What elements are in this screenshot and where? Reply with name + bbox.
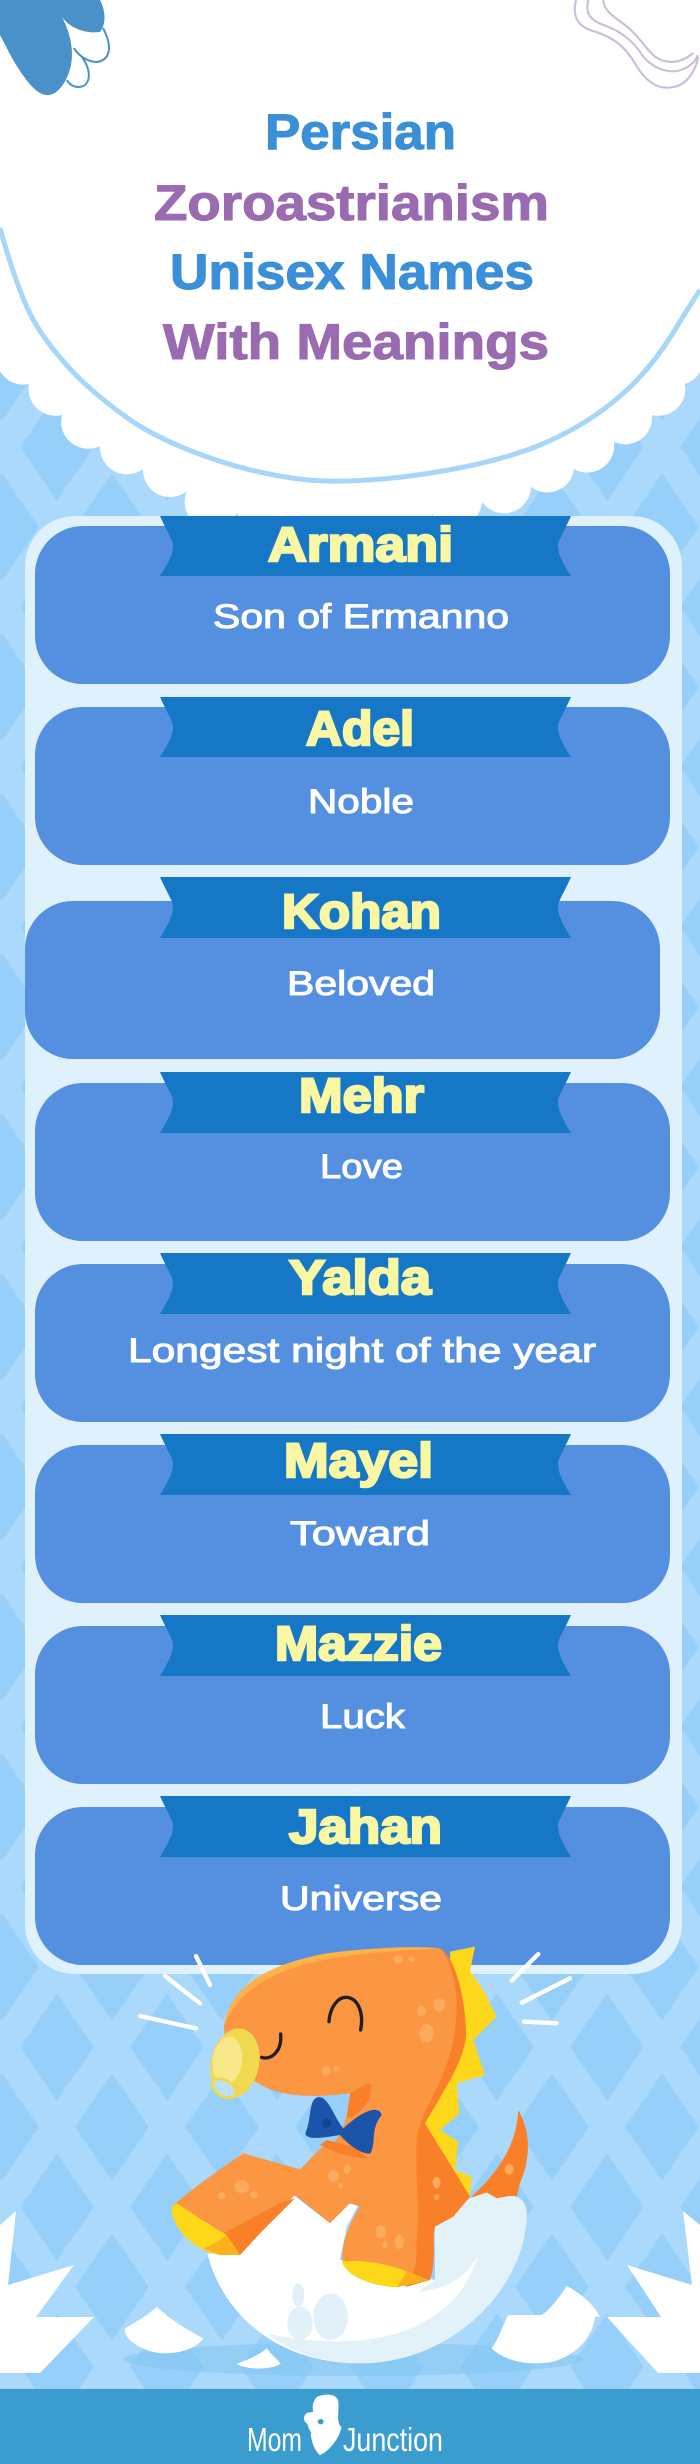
card: Adel: Noble	[308, 783, 414, 821]
card: Kohan: Beloved	[287, 965, 435, 1003]
title: With Meanings	[163, 314, 549, 370]
card: Jahan: Universe	[280, 1880, 442, 1918]
title	[154, 104, 549, 370]
card: Mayel: Toward	[290, 1515, 430, 1553]
card: Mazzie: Mazzie	[275, 1618, 442, 1671]
card: Mayel: Mayel	[284, 1435, 433, 1488]
card: Kohan	[25, 877, 660, 1059]
footer bar	[0, 2389, 700, 2464]
card: Adel	[35, 697, 670, 865]
decoration: purple waves top right	[575, 0, 698, 88]
scalloped white header circle	[0, 0, 700, 540]
card: Kohan: Kohan	[282, 886, 441, 939]
card: Yalda: Yalda	[289, 1252, 431, 1305]
card: Jahan: Jahan	[289, 1801, 442, 1854]
card: Mayel	[35, 1434, 670, 1603]
pale panel behind the cards	[25, 516, 682, 1974]
card: Jahan	[35, 1796, 670, 1965]
shell fragments	[125, 2286, 600, 2368]
title: Persian	[265, 104, 456, 160]
logo: MomJunction: Junction	[343, 2421, 443, 2458]
card: Yalda	[35, 1252, 670, 1422]
illustration: baby dinosaur hatching from egg	[123, 1947, 583, 2376]
logo: MomJunction	[247, 2395, 443, 2458]
header circle inner blue arc	[0, 228, 700, 481]
card: Armani: Son of Ermanno	[213, 598, 509, 636]
card: Adel: Adel	[306, 703, 414, 756]
card: Mazzie	[35, 1615, 670, 1784]
card: Armani: Armani	[268, 519, 453, 572]
card: Mazzie: Luck	[320, 1698, 406, 1736]
logo: MomJunction: Mom	[247, 2421, 302, 2458]
card: Yalda: Longest night of the year	[128, 1332, 596, 1370]
title: Zoroastrianism	[154, 175, 549, 231]
white spiky shape: bottom right	[607, 2211, 700, 2373]
card: Mehr: Mehr	[299, 1070, 424, 1123]
decoration: blue petals top left	[0, 0, 109, 95]
title: Unisex Names	[170, 244, 534, 300]
white spiky shape: bottom left	[0, 2211, 94, 2373]
card: Armani	[35, 516, 670, 684]
card: Mehr	[35, 1070, 670, 1241]
card: Mehr: Love	[320, 1148, 403, 1186]
